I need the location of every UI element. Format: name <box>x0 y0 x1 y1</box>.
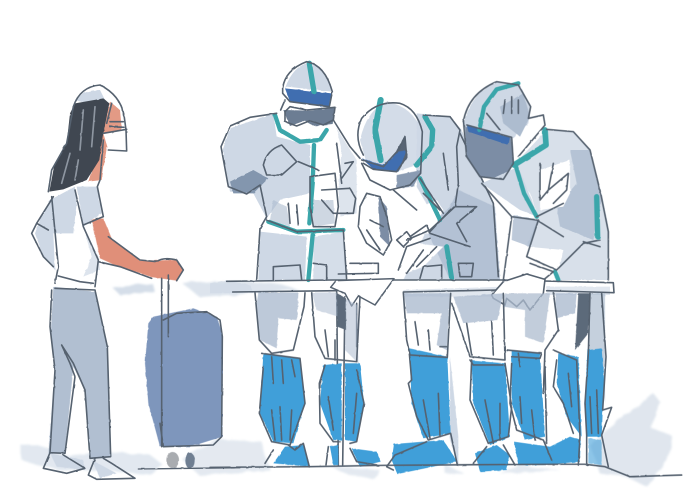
table <box>210 279 614 465</box>
worker one teal tape <box>268 63 343 280</box>
worker two teal tape <box>375 100 452 278</box>
upper leg washes <box>257 293 605 467</box>
worker one linework <box>221 62 378 280</box>
glove of worker three over table <box>492 274 545 310</box>
leg linework <box>255 293 612 470</box>
figure: worker one (left) <box>221 62 378 280</box>
figure: traveller woman <box>32 85 240 479</box>
paper on table <box>331 279 394 306</box>
worker two linework <box>358 103 498 278</box>
woman linework <box>32 85 240 479</box>
worker three suit washes <box>463 82 609 280</box>
face mask <box>103 129 127 151</box>
worker two suit washes <box>360 102 500 280</box>
table top wash <box>210 280 610 297</box>
table top lines <box>227 280 614 465</box>
figure: worker two (centre) <box>358 100 500 280</box>
ground line <box>210 464 682 477</box>
table shadow washes <box>113 281 300 297</box>
worker one suit washes <box>223 63 357 280</box>
hair <box>49 98 109 192</box>
ground washes <box>20 393 673 487</box>
worker three linework <box>463 82 608 280</box>
worker three teal tape <box>479 83 598 280</box>
woman washes <box>35 90 222 478</box>
shoe cover fills <box>260 348 604 474</box>
legs and blue shoe covers <box>210 293 682 477</box>
figure: worker three (right) <box>463 82 609 280</box>
